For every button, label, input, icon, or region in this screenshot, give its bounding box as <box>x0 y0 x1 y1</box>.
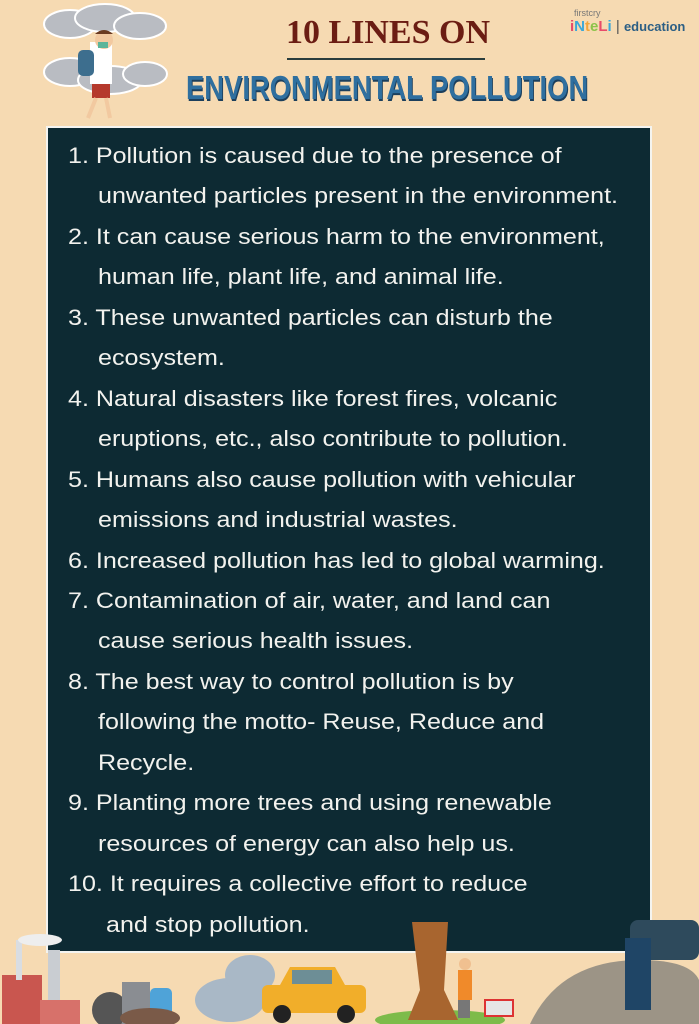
panel: 10 lines list: 9. Planting more trees and using renewable <box>68 790 552 815</box>
divider under title <box>287 58 485 60</box>
panel: 10 lines list: cause serious health issues. <box>98 628 413 653</box>
panel: 10 lines list: resources of energy can also help us. <box>98 831 515 856</box>
illustration: boy in smog clouds <box>43 3 168 118</box>
logo: iNteLi | education <box>570 18 685 35</box>
subtitle: ENVIRONMENTAL POLLUTION: ENVIRONMENTAL POLLUTION <box>186 69 588 106</box>
panel: 10 lines list: human life, plant life, and animal life. <box>98 264 504 289</box>
panel: 10 lines list: 7. Contamination of air, water, and land can <box>68 588 550 613</box>
panel: 10 lines list: unwanted particles present in the environment. <box>98 183 618 208</box>
title: 10 LINES ON: 10 LINES ON <box>286 14 490 51</box>
panel: 10 lines list: eruptions, etc., also contribute to pollution. <box>98 426 568 451</box>
panel: 10 lines list: 3. These unwanted particles can disturb the <box>68 305 553 330</box>
panel: 10 lines list <box>46 126 652 953</box>
logo <box>570 8 685 35</box>
panel: 10 lines list: Recycle. <box>98 750 194 775</box>
panel: 10 lines list: 10. It requires a collective effort to reduce <box>68 871 528 896</box>
panel: 10 lines list: 6. Increased pollution has led to global warming. <box>68 548 605 573</box>
panel: 10 lines list: 2. It can cause serious harm to the environment, <box>68 224 605 249</box>
panel: 10 lines list: and stop pollution. <box>106 912 310 937</box>
panel: 10 lines list: 1. Pollution is caused due to the presence of <box>68 143 562 168</box>
panel: 10 lines list: 5. Humans also cause pollution with vehicular <box>68 467 575 492</box>
logo: firstcry <box>574 8 600 18</box>
panel: 10 lines list: emissions and industrial wastes. <box>98 507 458 532</box>
panel: 10 lines list: 8. The best way to control pollution is by <box>68 669 514 694</box>
panel: 10 lines list: following the motto- Reuse, Reduce and <box>98 709 544 734</box>
illustration: pollution scene at bottom <box>2 920 699 1024</box>
panel: 10 lines list: ecosystem. <box>98 345 225 370</box>
panel: 10 lines list: 4. Natural disasters like forest fires, volcanic <box>68 386 557 411</box>
